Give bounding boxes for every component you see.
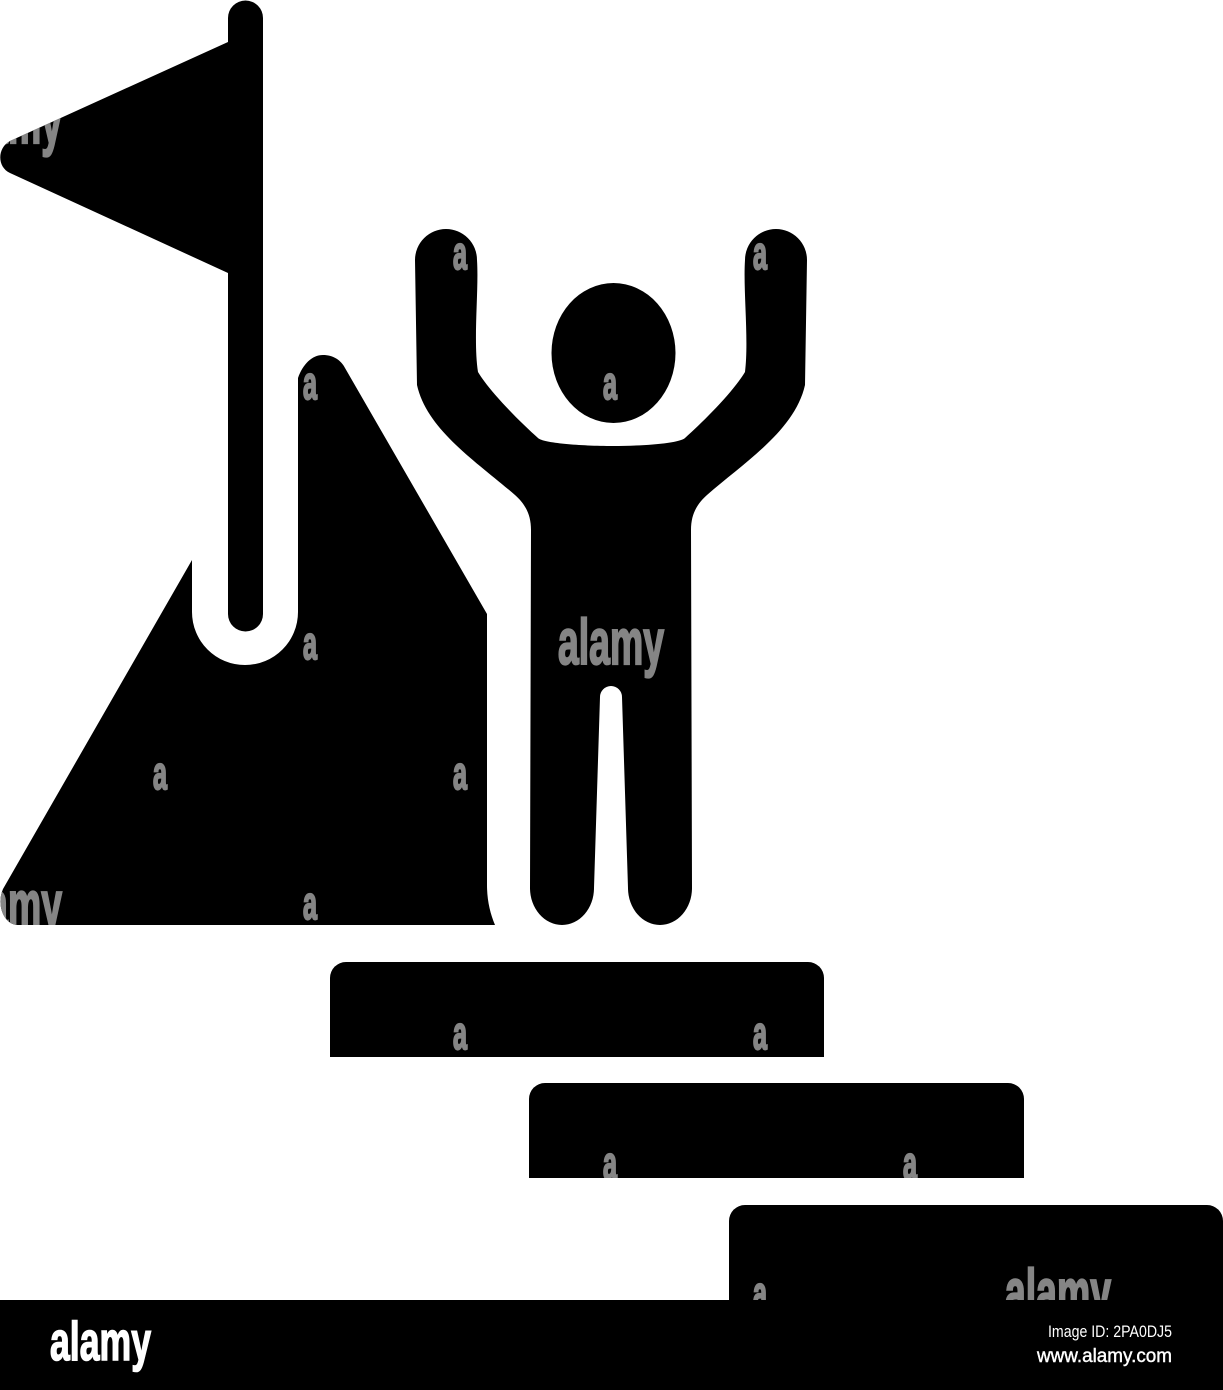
watermark text: a <box>903 1137 917 1189</box>
icon: stair steps <box>330 962 1223 1300</box>
watermark text: a <box>603 1137 617 1189</box>
watermark text: a <box>303 877 317 929</box>
image id: Image ID: 2PA0DJ5 <box>1048 1322 1172 1341</box>
watermark text: alamy <box>558 606 664 678</box>
watermark text: a <box>153 747 167 799</box>
icon: flag on pole <box>0 1 263 632</box>
watermark text: a <box>753 1007 767 1059</box>
footer bar <box>0 1300 1223 1390</box>
watermark text: a <box>603 357 617 409</box>
watermark text: a <box>453 747 467 799</box>
watermark text: a <box>453 227 467 279</box>
watermark text: a <box>753 227 767 279</box>
watermark text: alamy <box>1005 1256 1111 1328</box>
icon: mountain <box>0 355 495 925</box>
watermark text: a <box>303 357 317 409</box>
watermark text: a <box>753 1267 767 1319</box>
watermark text: a <box>453 1007 467 1059</box>
watermark text: a <box>303 617 317 669</box>
icon: person with raised arms <box>415 229 807 925</box>
footer logo: alamy <box>50 1310 151 1372</box>
website: www.alamy.com <box>1036 1346 1172 1367</box>
